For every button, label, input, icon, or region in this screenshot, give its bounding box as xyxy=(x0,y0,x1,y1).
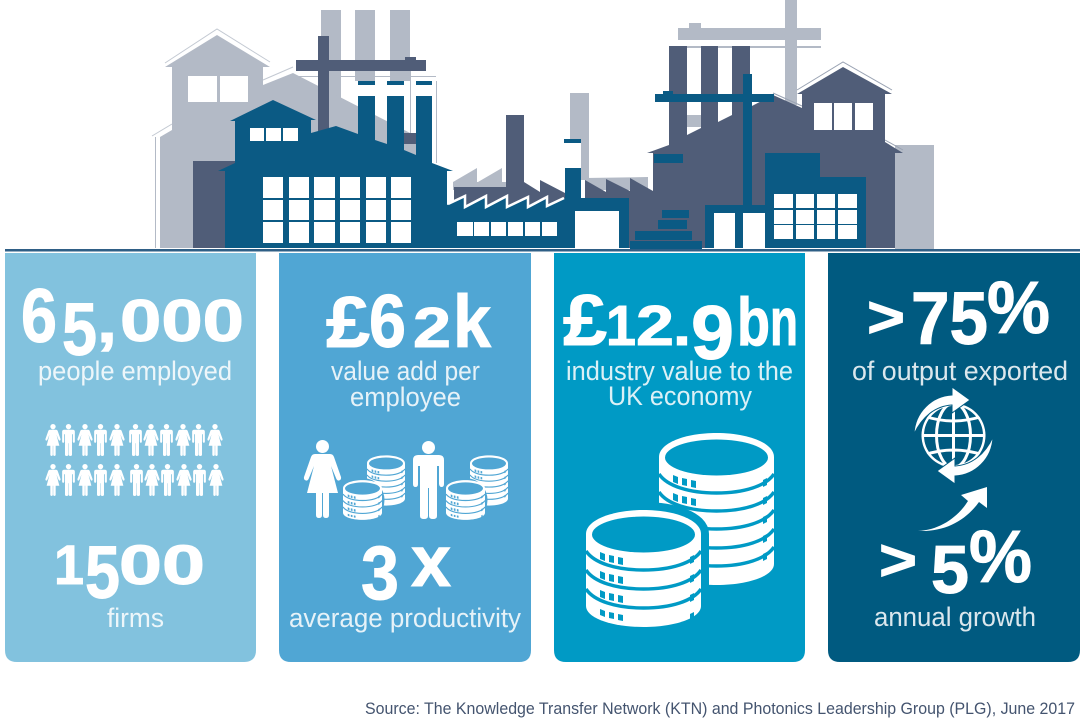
icon: growth arrow xyxy=(918,487,987,531)
heading: 3 x: 3 xyxy=(361,531,399,616)
panel: industry value: n xyxy=(770,284,798,360)
panel: industry value xyxy=(554,253,805,662)
panel: value add: k xyxy=(453,280,492,363)
factory: white windows xyxy=(250,128,411,243)
heading: >75%: > xyxy=(867,285,905,350)
heading: £12.9bn: £ xyxy=(563,281,607,361)
panel: exports and growth: % xyxy=(969,515,1032,598)
panel: industry value: b xyxy=(737,284,770,360)
factory: sawtooth shed xyxy=(447,93,653,249)
text: of output exported: of output exported xyxy=(852,356,1068,386)
panel: exports and growth: 5 xyxy=(931,532,969,608)
heading: 1500: 1 xyxy=(54,533,84,596)
panel: industry value: 2 xyxy=(636,294,674,358)
factory: blue crane and right block xyxy=(630,74,866,249)
panel: value add xyxy=(279,253,531,662)
panel: people employed: 00 xyxy=(119,533,205,596)
panel: value add: 6 xyxy=(369,279,406,363)
text: industry value to the UK economy xyxy=(566,356,793,411)
text: industry value to the UK economy: industry value to the xyxy=(566,356,793,386)
icon: woman, man and coins xyxy=(304,440,508,522)
panel: industry value: . xyxy=(673,294,691,357)
panel: exports and growth xyxy=(828,253,1080,662)
panel: exports and growth: % xyxy=(987,266,1050,349)
heading: >5%: > xyxy=(879,528,917,593)
source note: Source: The Knowledge Transfer Network (KTN) and Photonics Leadership Group (PLG), June 2017 xyxy=(365,700,1075,718)
panel: exports and growth: 75 xyxy=(911,277,988,360)
ground line xyxy=(5,249,1080,252)
panel: industry value: 9 xyxy=(691,291,734,376)
text: value add per employee: value add per xyxy=(331,356,480,386)
icon: coin stacks xyxy=(586,433,774,627)
factory: blue main building xyxy=(218,81,453,248)
factory: dark block and crane xyxy=(193,36,426,248)
panel: people employed: 000 xyxy=(120,288,244,354)
illustration: factory skyline xyxy=(5,0,1080,252)
factory: right windows and doors xyxy=(714,103,873,249)
heading: £62k: £ xyxy=(326,283,370,363)
panel: industry value: 1 xyxy=(606,294,636,358)
panel: people employed: 5 xyxy=(62,288,97,371)
panel: people employed: , xyxy=(97,288,117,355)
factory: pale background buildings left xyxy=(152,10,437,248)
text: average productivity: average productivity xyxy=(289,603,521,633)
factory: dark right building xyxy=(647,46,903,248)
text: people employed: people employed xyxy=(38,356,232,386)
text: value add per employee: employee xyxy=(350,382,461,412)
panel: value add: x xyxy=(411,522,451,602)
icon: rows of people xyxy=(45,424,224,496)
panel: people employed xyxy=(5,253,256,662)
panel: people employed: 5 xyxy=(85,531,120,614)
panel: value add: 2 xyxy=(413,296,451,360)
text: firms: firms xyxy=(107,603,164,633)
text: annual growth: annual growth xyxy=(874,602,1036,632)
icon: globe with arrows xyxy=(914,387,993,484)
text: value add per employee xyxy=(331,356,480,412)
factory: pale background buildings right xyxy=(678,0,934,249)
text: industry value to the UK economy: UK economy xyxy=(608,381,752,411)
heading: 65,000: 6 xyxy=(21,274,57,359)
